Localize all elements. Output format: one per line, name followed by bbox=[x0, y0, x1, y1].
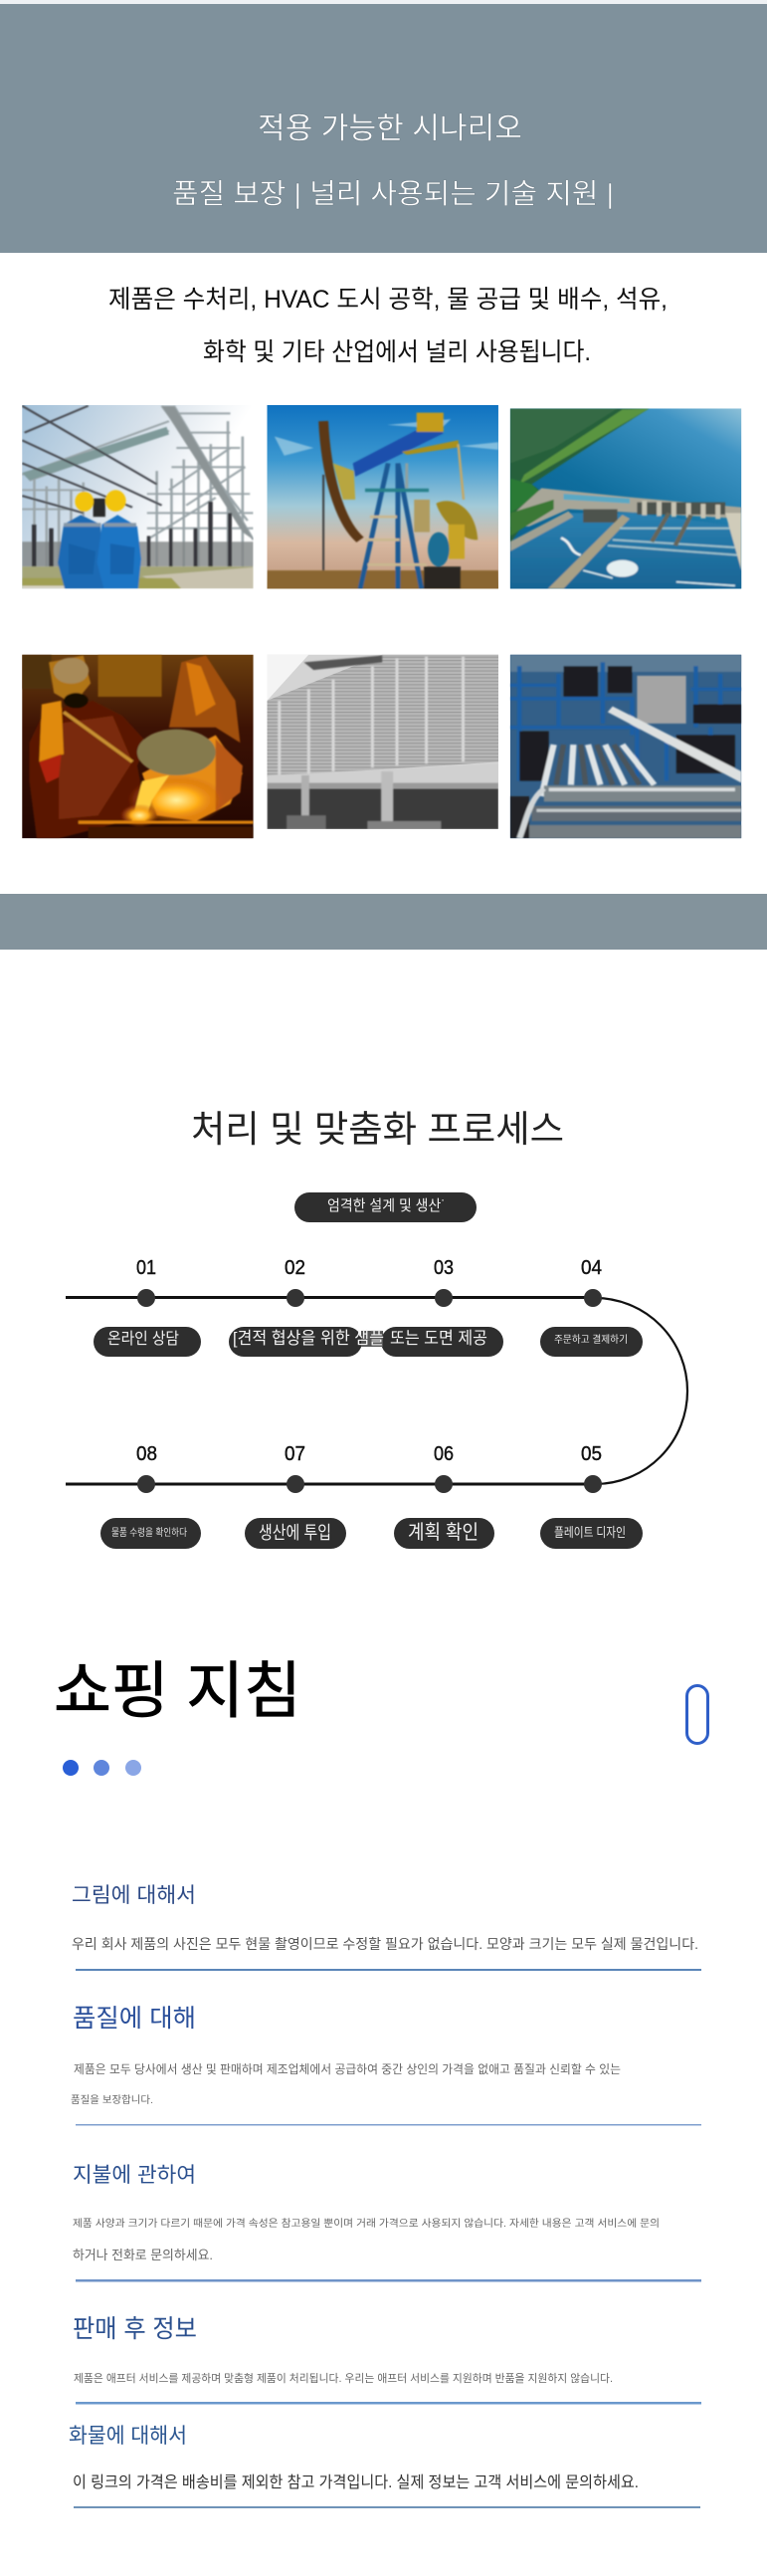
section: about payment bbox=[73, 2164, 701, 2281]
intro text: 제품은 수처리, HVAC 도시 공학, 물 공급 및 배수, 석유, bbox=[108, 286, 668, 314]
heading: process: 처리 및 맞춤화 프로세스 bbox=[191, 1109, 564, 1150]
section: about quality: 품질에 대해 bbox=[73, 2005, 196, 2033]
section: after-sales information: 판매 후 정보 bbox=[73, 2315, 197, 2343]
step 04 bbox=[540, 1257, 643, 1357]
step 07 bbox=[245, 1443, 346, 1549]
icon: three blue dots bbox=[63, 1760, 141, 1776]
section: about pictures: 우리 회사 제품의 사진은 모두 현물 촬영이므로 수정할 필요가 없습니다. 모양과 크기는 모두 실제 물건입니다. bbox=[72, 1936, 698, 1952]
photo grid bbox=[22, 405, 741, 838]
step 06: 06 bbox=[434, 1443, 454, 1465]
section: about payment: 지불에 관하여 bbox=[73, 2164, 196, 2187]
step 04: 주문하고 결제하기 bbox=[554, 1333, 628, 1346]
panel: top banner bbox=[0, 4, 767, 253]
step 08: 물품 수령을 확인하다 bbox=[111, 1526, 187, 1539]
step 05: 05 bbox=[581, 1443, 602, 1465]
bottom grey band bbox=[0, 894, 767, 950]
section: about pictures bbox=[72, 1884, 701, 1971]
step 07: 생산에 투입 bbox=[259, 1523, 331, 1543]
section: about freight: 이 링크의 가격은 배송비를 제외한 참고 가격입니다. 실제 정보는 고객 서비스에 문의하세요. bbox=[73, 2473, 639, 2491]
photo: molten metal foundry bbox=[22, 655, 254, 838]
process flow line bbox=[66, 1298, 687, 1484]
step 06 bbox=[394, 1443, 494, 1549]
section: about payment: 제품 사양과 크기가 다르기 때문에 가격 속성은 참고용일 뿐이며 거래 가격으로 사용되지 않습니다. 자세한 내용은 고객 서비스에 문의 bbox=[73, 2217, 660, 2230]
step 02 and 03: 또는 도면 제공 bbox=[390, 1329, 487, 1348]
step 01: 01 bbox=[136, 1257, 156, 1279]
step 02 and 03: [견적 협상을 위한 샘플 bbox=[233, 1329, 384, 1348]
section: after-sales information bbox=[73, 2315, 701, 2405]
step 02 and 03: 02 bbox=[285, 1257, 305, 1279]
section: about pictures: 그림에 대해서 bbox=[72, 1884, 196, 1907]
step 01: 온라인 상담 bbox=[107, 1330, 179, 1348]
step 02 and 03: 03 bbox=[434, 1257, 454, 1279]
photo: power substation with workers bbox=[22, 405, 254, 589]
step 02 and 03 bbox=[229, 1257, 503, 1357]
banner title: 적용 가능한 시나리오 bbox=[258, 112, 522, 145]
section: about quality: 품질을 보장합니다. bbox=[71, 2094, 153, 2106]
step 06: 계획 확인 bbox=[408, 1521, 479, 1544]
step 08 bbox=[100, 1443, 201, 1549]
callout pill: strict design and production: 엄격한 설계 및 생산˙ bbox=[327, 1197, 446, 1214]
section: about freight: 화물에 대해서 bbox=[69, 2425, 187, 2448]
section: about freight bbox=[69, 2425, 700, 2508]
step 07: 07 bbox=[285, 1443, 305, 1465]
section: about quality bbox=[71, 2005, 701, 2126]
section: about quality: 제품은 모두 당사에서 생산 및 판매하며 제조업체에서 공급하여 중간 상인의 가격을 없애고 품질과 신뢰할 수 있는 bbox=[74, 2062, 621, 2076]
step 01 bbox=[94, 1257, 201, 1357]
step 04: 04 bbox=[581, 1257, 602, 1279]
section: about payment: 하거나 전화로 문의하세요. bbox=[73, 2248, 213, 2262]
icon: blue capsule outline bbox=[686, 1686, 708, 1744]
photo: industrial pipes bbox=[510, 655, 741, 838]
photo: river dam water treatment bbox=[510, 408, 741, 589]
step 05: 플레이트 디자인 bbox=[554, 1525, 626, 1540]
banner subtitle: 품질 보장 | 널리 사용되는 기술 지원 | bbox=[172, 178, 614, 209]
step 08: 08 bbox=[136, 1443, 157, 1465]
photo: oil pump jack bbox=[267, 405, 498, 589]
callout pill: strict design and production bbox=[294, 1192, 477, 1222]
intro text bbox=[108, 286, 668, 366]
section: after-sales information: 제품은 애프터 서비스를 제공하며 맞춤형 제품이 처리됩니다. 우리는 애프터 서비스를 지원하며 반품을 지원하지 않습니다. bbox=[74, 2371, 613, 2385]
heading: shopping guide: 쇼핑 지침 bbox=[54, 1657, 301, 1726]
intro text: 화학 및 기타 산업에서 널리 사용됩니다. bbox=[203, 338, 591, 366]
step 05 bbox=[540, 1443, 643, 1549]
photo: cooling tower bbox=[267, 655, 498, 829]
top light strip bbox=[0, 0, 767, 4]
